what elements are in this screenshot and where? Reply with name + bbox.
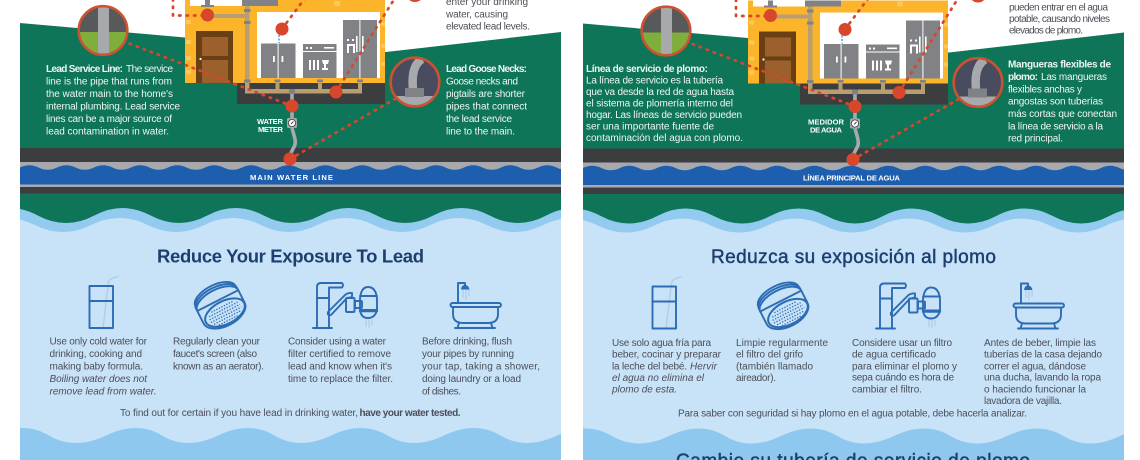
text: mangueras flexibles: flexibles anchas y: [1008, 84, 1082, 96]
icon: aerator: [190, 276, 250, 335]
text: tip 1: Use only cold water for: [50, 336, 148, 348]
text: consejo 3: [852, 338, 957, 396]
text: consejo 1: Hervir: [690, 362, 718, 372]
text: línea de servicio: que va desde la red de agua hasta: [586, 87, 734, 98]
text: lead service line: the water main to the home's: [46, 89, 173, 100]
text: consejo 4: [984, 338, 1102, 407]
label: línea principal de agua: LÍNEA PRINCIPAL DE AGUA: [803, 174, 901, 182]
upstairs room: [190, 0, 278, 6]
text: línea de servicio: Línea de servicio de plomo:: [586, 64, 708, 75]
icon: faucet filter: [313, 283, 377, 328]
text: tip 4: your tap, taking a shower,: [422, 362, 540, 372]
text: lead goose necks: the lead service: [446, 114, 512, 125]
illustration: house: [185, 0, 385, 104]
ground: [20, 23, 561, 200]
service pipe and water meter, Spanish: [850, 90, 860, 158]
basement: [237, 83, 385, 104]
text: test your water: [120, 408, 461, 419]
text: consejo 1: [611, 338, 722, 396]
text: top right fragment: elevated lead levels.: [446, 22, 530, 32]
text: línea de servicio: hogar. Las líneas de servicio pueden: [586, 110, 742, 121]
text: top right fragment: water, causing: [445, 10, 508, 20]
text: consejo 1: la leche del bebé.: [612, 362, 687, 372]
text: test your water: have your water tested.: [360, 408, 461, 419]
text: tip 3: lead and know when it's: [288, 362, 392, 372]
dotted callout lines: [128, 0, 400, 159]
text: consejo 4: lavadora de vajilla.: [984, 396, 1062, 407]
text: línea de servicio: [586, 64, 743, 144]
text: test your water: To find out for certain if you have lead in drinking water,: [120, 408, 358, 419]
text: lead service line: lines can be a major source of: [46, 114, 172, 125]
icon: goose neck circle: [390, 57, 440, 108]
text: mangueras flexibles: Las mangueras: [1041, 72, 1107, 83]
label: water meter: WATER: [257, 117, 284, 126]
text: lead goose necks: Lead Goose Necks:: [446, 64, 527, 75]
text: tip 1: Boiling water does not: [50, 374, 148, 385]
kitchen room: [257, 12, 380, 78]
top wave: mid blue: [0, 190, 656, 232]
text: tip 4: [422, 336, 540, 398]
text: tip 1: drinking, cooking and: [50, 349, 142, 360]
text: lead goose necks: [446, 64, 527, 138]
house walls: [185, 0, 385, 83]
icon: bathtub: [450, 283, 501, 328]
text: línea de servicio: ser una importante fuente de: [586, 122, 714, 132]
text: tip 4: your pipes by running: [422, 349, 514, 360]
text: tip 1: remove lead from water.: [50, 386, 156, 398]
bottom wave: [0, 428, 614, 460]
text: línea de servicio: contaminación del agua con plomo.: [586, 133, 743, 144]
label: main water line: MAIN WATER LINE: [250, 173, 333, 182]
text: lead goose necks: line to the main.: [446, 126, 515, 138]
text: mangueras flexibles: Mangueras flexibles de: [1008, 60, 1111, 70]
text: tip 3: [288, 336, 393, 385]
icon: service line circle: [78, 5, 128, 57]
text: consejo 2: Limpie regularmente: [736, 338, 828, 349]
text: analizar: Para saber con seguridad si hay plomo en el agua potable, debe hacerla analizar.: [678, 408, 1027, 420]
text: top right fragment, Spanish: pueden entrar en el agua: [1009, 2, 1108, 14]
panel: English: [0, 23, 659, 460]
text: top right fragment: [445, 0, 530, 32]
cabinet: [261, 44, 296, 78]
text: consejo 2: [736, 338, 828, 384]
icon: bathtub, Spanish: [1014, 284, 1064, 328]
text: tip 3: time to replace the filter.: [288, 374, 393, 385]
text: mangueras flexibles: [1008, 60, 1117, 144]
pipe fittings: [244, 9, 363, 82]
text: mangueras flexibles: angostas son tuberías: [1008, 96, 1103, 108]
text: consejo 1: beber, cocinar y preparar: [612, 350, 722, 360]
text: lead goose necks: pipes that connect: [446, 102, 527, 112]
text: lead service line: line is the pipe that runs from: [46, 76, 172, 88]
text: tip 4: of dishes.: [422, 386, 461, 398]
dotted callout lines, Spanish: [691, 0, 963, 160]
text: lead service line: lead contamination in water.: [46, 126, 169, 138]
panel background: [20, 190, 561, 460]
text: lead service line: internal plumbing. Lead service: [46, 102, 180, 112]
label: medidor de agua: MEDIDOR: [808, 118, 845, 126]
text: lead service line: Lead Service Line:: [46, 64, 123, 75]
text: consejo 4: Antes de beber, limpie las: [984, 338, 1096, 349]
text: consejo 3: para eliminar el plomo y: [852, 362, 957, 372]
red markers: [201, 0, 424, 166]
fridge: [343, 20, 377, 78]
heading: reduce exposure: Reduce Your Exposure To Lead: [157, 246, 424, 266]
text: tip 1: making baby formula.: [50, 362, 143, 372]
text: consejo 3: cambiar el filtro.: [852, 384, 922, 396]
text: consejo 1: plomo de esta.: [611, 384, 677, 396]
text: tip 4: Before drinking, flush: [422, 336, 512, 348]
text: tip 4: doing laundry or a load: [422, 374, 521, 385]
icon: aerator, Spanish: [753, 276, 813, 336]
text: consejo 2: aireador).: [736, 373, 776, 384]
text: lead goose necks: Goose necks and: [446, 76, 518, 88]
text: tip 2: [173, 336, 264, 372]
text: mangueras flexibles: plomo:: [1008, 72, 1038, 83]
label: medidor de agua: [808, 118, 845, 134]
text: línea de servicio: el sistema de plomería interno del: [586, 98, 733, 110]
text: consejo 3: sepa cuándo es hora de: [852, 372, 954, 384]
icon: faucet filter, Spanish: [876, 284, 940, 328]
text: consejo 4: tuberías de la casa dejando: [984, 350, 1102, 360]
icon: goose neck circle, Spanish: [953, 58, 1003, 108]
text: tip 2: known as an aerator).: [173, 362, 264, 372]
door: [196, 31, 233, 83]
text: lead service line: [46, 64, 180, 138]
label: medidor de agua: DE AGUA: [810, 126, 843, 134]
text: mangueras flexibles: red principal.: [1008, 134, 1063, 144]
text: tip 3: filter certified to remove: [288, 349, 391, 360]
text: lead goose necks: pigtails are shorter: [446, 89, 526, 100]
text: top right fragment, Spanish: elevados de plomo.: [1009, 26, 1083, 36]
illustration: house, Spanish: [748, 0, 948, 104]
top wave: green: [0, 190, 659, 223]
text: consejo 4: una ducha, lavando la ropa: [984, 372, 1101, 384]
text: consejo 4: o haciendo funcionar la: [984, 384, 1086, 396]
icon: service line circle, Spanish: [641, 6, 691, 58]
text: lead service line: The service: [126, 64, 173, 75]
icon: glass: [90, 276, 118, 328]
text: mangueras flexibles: más cortas que conectan: [1008, 109, 1117, 120]
icon: glass, Spanish: [652, 277, 681, 328]
red markers, Spanish: [764, 0, 987, 166]
text: línea de servicio: La línea de servicio es la tubería: [586, 76, 723, 86]
text: consejo 1: Use solo agua fría para: [612, 338, 711, 349]
main water line: [20, 148, 575, 194]
heading: reduzca: Reduzca su exposición al plomo: [711, 247, 996, 268]
wall highlights: [186, 1, 385, 74]
faucet drip: [278, 35, 280, 43]
service pipe and water meter: [287, 89, 297, 158]
text: tip 2: faucet's screen (also: [173, 349, 257, 360]
text: tip 1: [50, 336, 156, 398]
label: water meter: METER: [258, 125, 284, 134]
text: consejo 2: el filtro del grifo: [736, 350, 803, 360]
label: water meter: [257, 117, 284, 134]
text: tip 2: Regularly clean your: [173, 336, 261, 348]
text: top right fragment, Spanish: potable, causando niveles: [1009, 14, 1110, 25]
text: consejo 2: (también llamado: [736, 362, 813, 372]
text: consejo 4: correr el agua, dándose: [984, 362, 1086, 372]
interior pipes: [210, 6, 362, 94]
text: consejo 3: de agua certificado: [852, 350, 936, 360]
text: consejo 3: Considere usar un filtro: [852, 338, 952, 349]
text: mangueras flexibles: la línea de servicio a la: [1008, 122, 1103, 132]
text: tip 3: Consider using a water: [288, 336, 387, 348]
dishwasher: [303, 44, 336, 78]
panel: Spanish: [485, 24, 1140, 460]
text: consejo 1: el agua no elimina el: [612, 373, 705, 384]
text: top right fragment, Spanish: [1009, 2, 1110, 36]
